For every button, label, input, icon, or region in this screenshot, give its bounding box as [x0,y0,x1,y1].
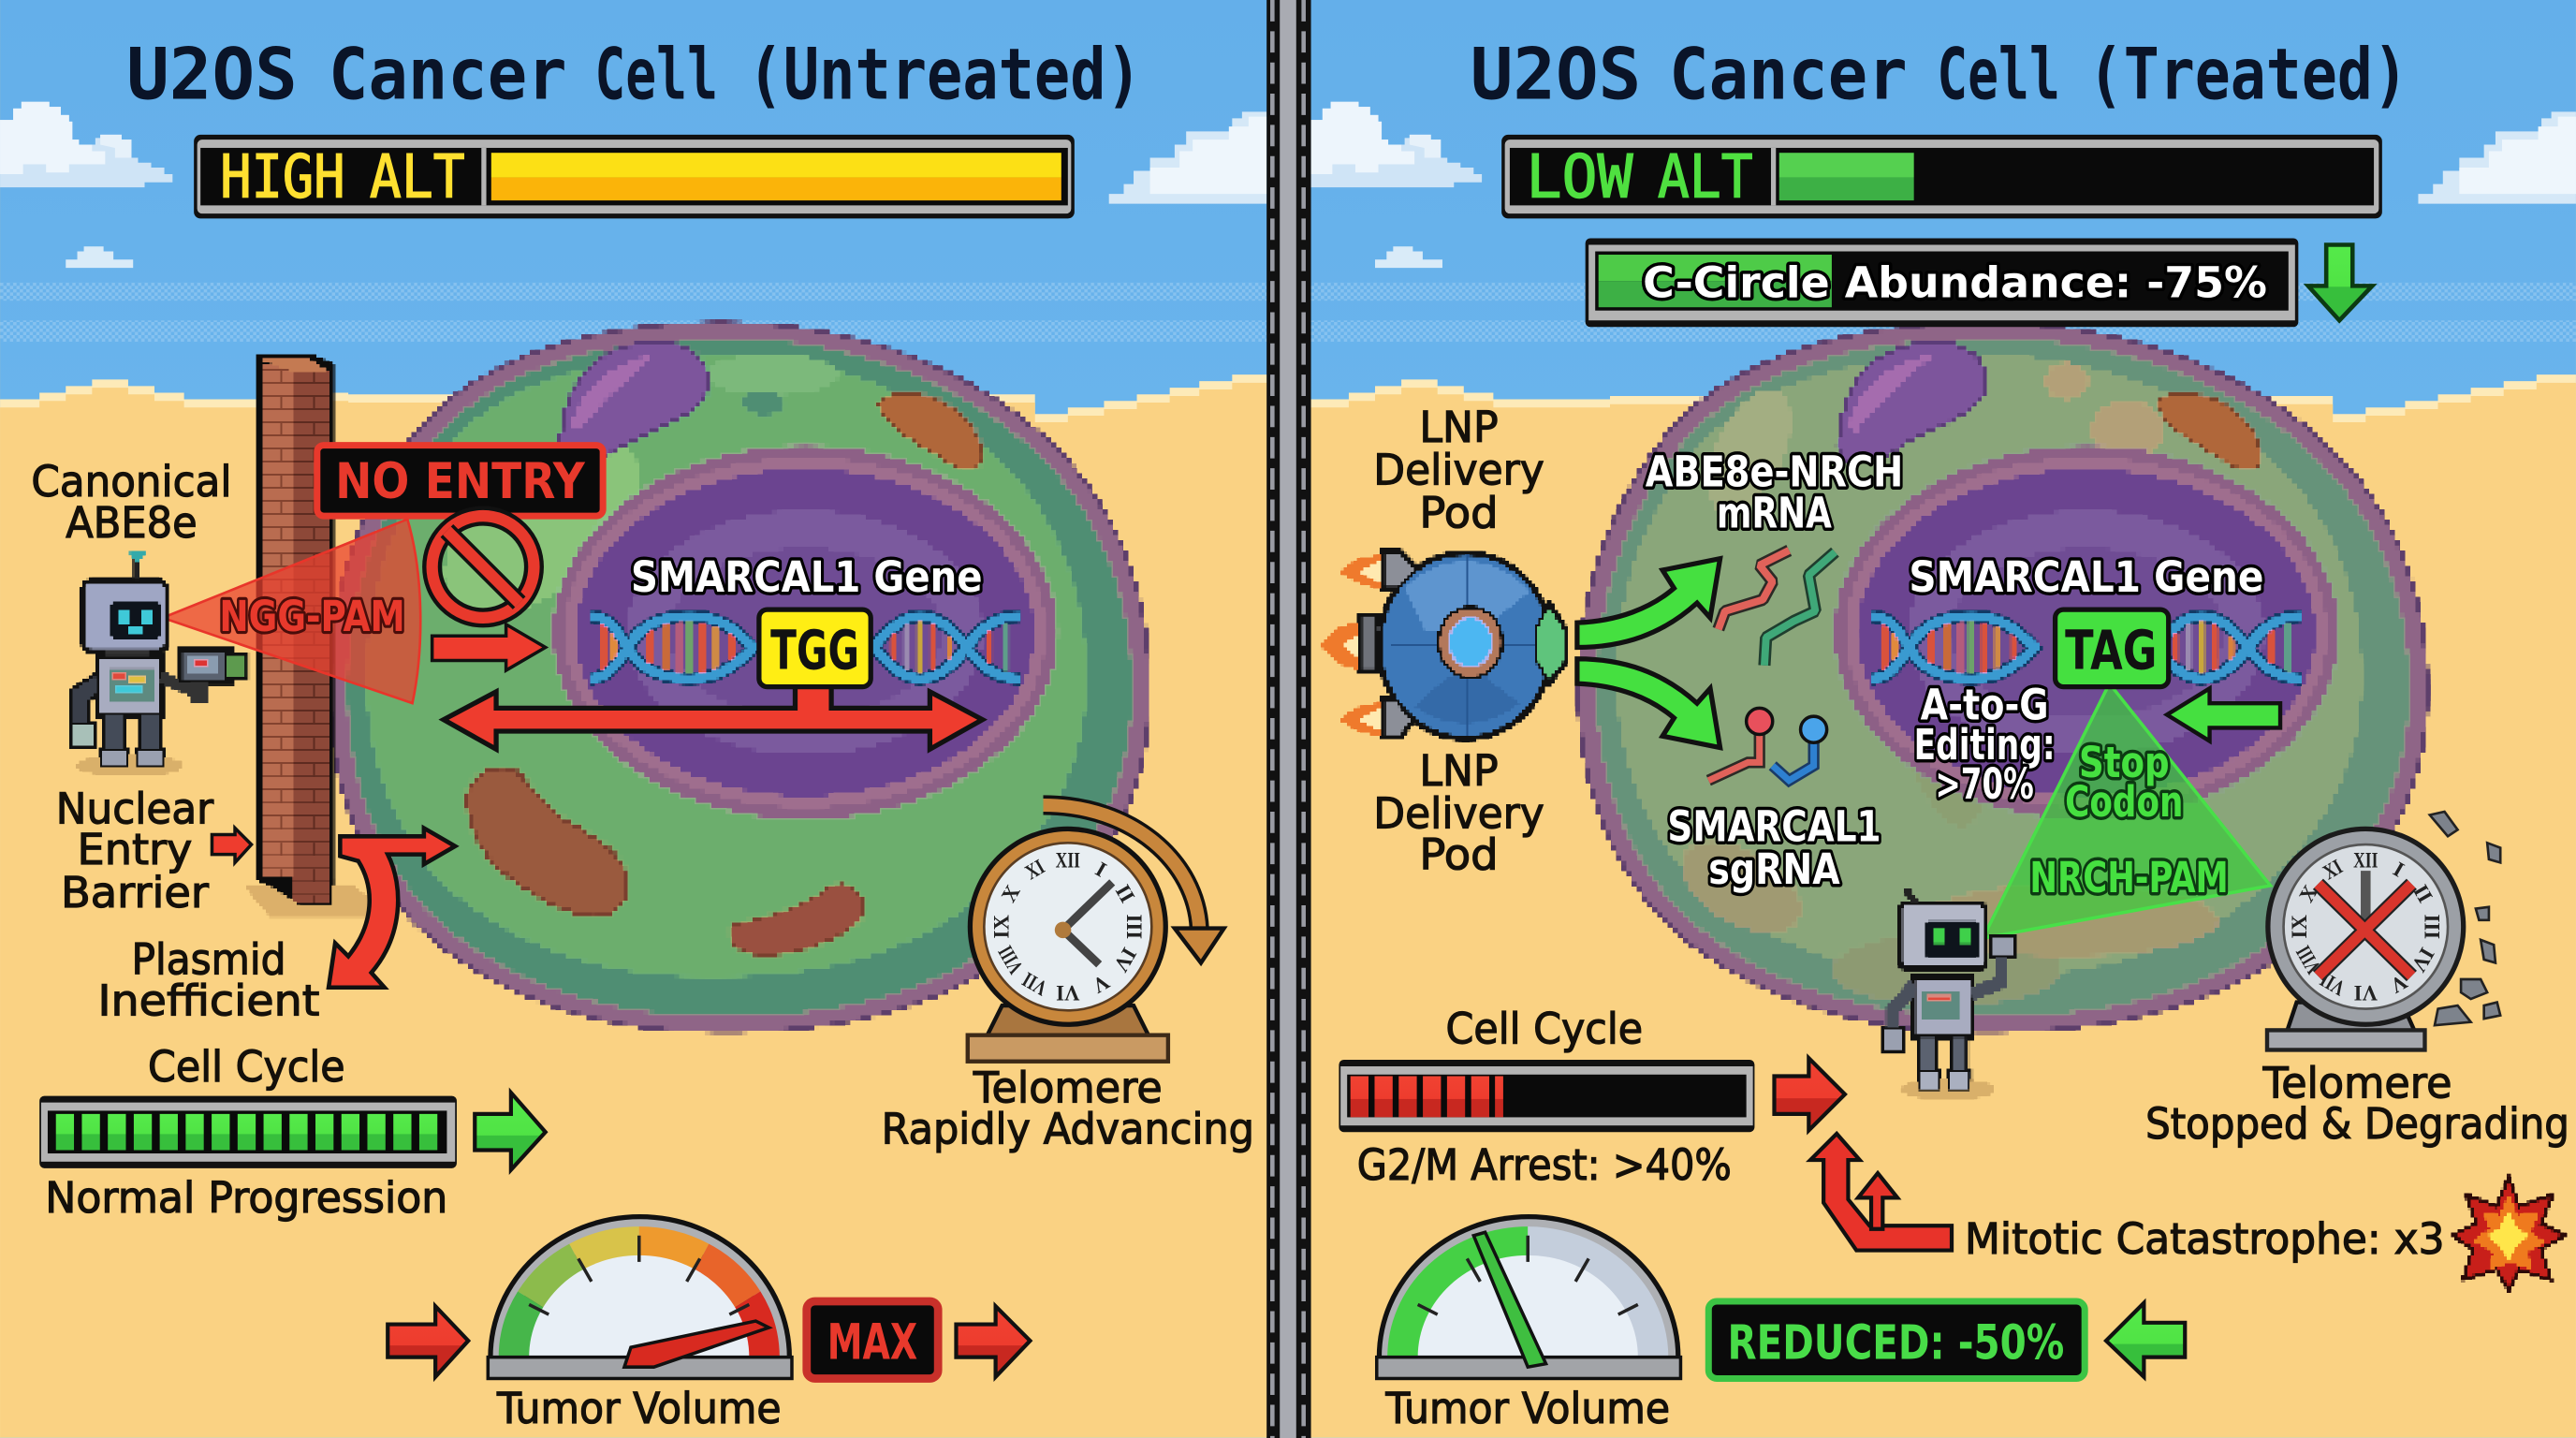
icon: telomere clock stopped: IV [2407,944,2439,976]
title: untreated: (Untreated) [748,33,1142,115]
label: telomere rapidly advancing: Telomere [973,1064,1163,1113]
label: nuclear entry barrier: Entry [78,825,192,874]
label: tumor volume, treated: Tumor Volume [1384,1384,1670,1433]
label: nuclear entry barrier [56,784,213,917]
label: nuclear entry barrier: Nuclear [56,784,213,833]
arrow: plasmid inefficient branch [329,829,455,988]
arrow: pod to mRNA [1577,559,1720,647]
icon: telomere clock advancing: III [1122,915,1146,939]
label: LNP delivery pod, top: Pod [1419,488,1499,537]
icon: mRNA strands [1719,550,1835,666]
cell cycle: G2/M arrest [1339,1004,1754,1190]
label: telomere rapidly advancing: Rapidly Advancing [882,1104,1254,1153]
icon: telomere clock advancing: VIII [993,942,1028,977]
icon: telomere clock stopped: IX [2288,915,2311,939]
label: LNP delivery pod, top: Delivery [1373,446,1544,495]
icon: telomere clock stopped: VII [2316,968,2349,1000]
panel: untreated cell [31,33,1254,1433]
label: NRCH-PAM: NRCH-PAM [2029,853,2229,902]
arrow: to TAG [2167,688,2280,741]
gene label, treated: SMARCAL1 Gene [1909,552,2263,602]
DNA helix: edited SMARCAL1 gene [1873,616,2300,679]
icon: telomere clock advancing: IV [1109,944,1141,976]
status bar: LOW ALT: ALT [1658,142,1753,212]
bar: C-Circle abundance [1586,238,2298,327]
icon: explosion [2454,1180,2563,1288]
title: treated: Cell [1937,33,2060,115]
label: telomere rapidly advancing [882,1064,1254,1153]
icon: telomere clock advancing: VII [1018,968,1051,1000]
arrow: mitotic catastrophe up to cell cycle [1810,1134,1952,1251]
icon: telomere clock advancing: I [1091,858,1110,882]
icon: telomere clock stopped: I [2390,858,2408,882]
label: LNP delivery pod, bottom: LNP [1419,746,1499,796]
icon: telomere clock advancing: VI [1056,981,1079,1005]
status: MAX [807,1301,938,1378]
robot: canonical ABE8e [72,552,246,775]
arrow: reduced [2106,1303,2185,1377]
icon: LNP delivery pod [1321,552,1566,738]
icon: prohibition sign [432,516,534,618]
label: plasmid inefficient: Inefficient [97,976,319,1026]
label: A-to-G editing: Editing: [1914,720,2056,770]
label: LNP delivery pod, top [1373,403,1544,537]
robot: ABE8e-NRCH [1882,888,2014,1099]
title: treated: Cancer [1669,33,1908,115]
cell cycle: normal progression: Normal Progression [45,1173,447,1223]
cell cycle: normal progression [39,1042,457,1223]
status bar: HIGH ALT: HIGH [220,142,345,212]
label: A-to-G editing: >70% [1935,759,2034,809]
label: SMARCAL1 sgRNA [1667,802,1881,894]
label: ABE8e-NRCH mRNA: ABE8e-NRCH [1646,447,1903,496]
title: untreated: Cell [594,33,718,115]
label: plasmid inefficient: Plasmid [131,935,285,985]
cell cycle: normal progression: Cell Cycle [148,1042,345,1092]
status bar: HIGH ALT [194,135,1075,218]
bar: C-Circle abundance: C-Circle Abundance: -75% [1643,258,2267,308]
label: stop codon: Codon [2065,777,2183,827]
title: untreated: Cancer [329,33,567,115]
label: SMARCAL1 sgRNA: sgRNA [1708,844,1840,894]
icon: telomere clock stopped: III [2420,915,2443,939]
codon box: TAG [2056,609,2169,687]
panel: treated cell [1321,33,2569,1433]
clouds: left panel [0,102,1266,268]
label: telomere stopped: Telomere [2262,1058,2452,1108]
codon box: TGG [759,609,871,687]
label: canonical ABE8e: ABE8e [66,498,198,548]
status bar: LOW ALT [1501,135,2382,218]
title: treated: U2OS [1471,33,1641,115]
cell cycle: G2/M arrest: G2/M Arrest: >40% [1357,1140,1732,1190]
label: canonical ABE8e: Canonical [31,457,232,506]
arrow: from gauge [956,1306,1030,1377]
icon: sgRNA [1708,708,1827,781]
wall: nuclear entry barrier [246,355,394,917]
label: ABE8e-NRCH mRNA: mRNA [1717,488,1832,537]
status: MAX: MAX [827,1313,917,1371]
sign: no entry: NO ENTRY [335,453,586,510]
beam: NRCH-PAM [1983,683,2271,938]
label: LNP delivery pod, bottom: Pod [1419,829,1499,879]
status: reduced -50% [1708,1301,2085,1378]
label: mitotic catastrophe: Mitotic Catastrophe: x3 [1965,1214,2445,1264]
icon: telomere clock stopped: XI [2319,855,2347,884]
title: untreated: U2OS [126,33,298,115]
icon: telomere clock advancing [968,805,1224,1062]
icon: telomere clock advancing: XII [1056,849,1080,873]
status bar: LOW ALT: LOW [1526,142,1634,212]
label: SMARCAL1 sgRNA: SMARCAL1 [1667,802,1881,852]
icon: telomere clock advancing: X [997,881,1025,906]
icon: telomere clock stopped: V [2386,970,2411,998]
label: canonical ABE8e [31,457,232,548]
label: A-to-G editing: A-to-G [1921,681,2049,730]
arrow: to barrier [212,829,252,862]
label: nuclear entry barrier: Barrier [61,868,209,917]
label: telomere stopped [2145,1058,2569,1149]
label: ABE8e-NRCH mRNA [1646,447,1903,537]
icon: telomere clock stopped [2265,812,2500,1049]
status: reduced -50%: REDUCED: -50% [1727,1315,2064,1371]
label: LNP delivery pod, top: LNP [1419,403,1499,452]
label: plasmid inefficient [97,935,319,1026]
codon box: TAG: TAG [2065,618,2157,682]
beam: NGG-PAM [163,520,420,703]
label: LNP delivery pod, bottom [1373,746,1544,879]
gauge: tumor volume reduced [1377,1214,1680,1378]
gauge: tumor volume max [488,1214,792,1378]
cell body with organelles, treated [1577,322,2428,1033]
gene label: SMARCAL1 Gene [631,552,983,602]
label: stop codon [2065,738,2183,827]
arrow: G2/M [1774,1058,1845,1130]
arrow: blocked to nucleus [432,624,546,670]
arrow: pod to sgRNA [1577,659,1720,748]
status bar: HIGH ALT: ALT [370,142,465,212]
clouds: right panel [1310,102,2576,268]
arrow: into gauge [388,1306,468,1377]
label: tumor volume: Tumor Volume [496,1384,782,1433]
codon box: TGG: TGG [770,618,859,682]
label: LNP delivery pod, bottom: Delivery [1373,789,1544,839]
icon: telomere clock stopped: XII [2353,849,2378,873]
arrow: C-Circle down [2308,244,2372,320]
icon: telomere clock advancing: V [1088,970,1114,998]
icon: telomere clock stopped: X [2294,881,2322,906]
centre divider [1266,0,1311,1438]
DNA helix: SMARCAL1 gene [592,616,1018,679]
debris [2430,812,2500,1025]
icon: telomere clock advancing: XI [1021,855,1048,884]
arrow: progression [475,1093,546,1170]
cell cycle: G2/M arrest: Cell Cycle [1445,1004,1643,1053]
icon: telomere clock advancing: II [1111,881,1139,907]
icon: telomere clock stopped: II [2408,881,2437,907]
icon: telomere clock advancing: IX [990,915,1014,939]
title: treated: (Treated) [2088,33,2408,115]
label: A-to-G editing [1914,681,2056,809]
cell body with organelles [329,322,1150,1033]
beam label: NGG-PAM [219,592,405,641]
icon: telomere clock stopped: VIII [2291,942,2325,977]
label: stop codon: Stop [2079,738,2170,787]
icon: telomere clock stopped: VI [2354,981,2378,1005]
blocked range double arrow [444,664,983,749]
